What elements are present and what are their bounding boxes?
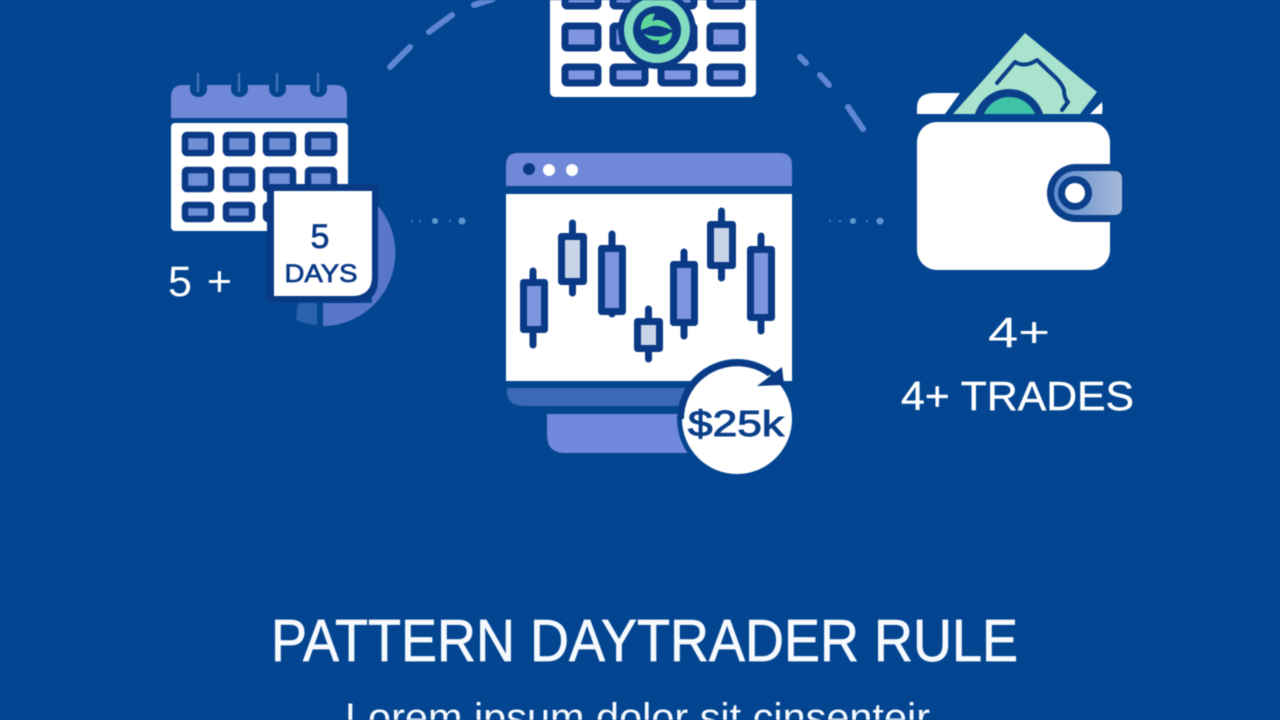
calendar ring notches: [190, 80, 327, 97]
note: 5 days: DAYS: [284, 260, 358, 288]
icon: candlestick monitor: [506, 153, 797, 479]
label: 4+: 4+: [988, 309, 1050, 357]
icon: top calendar with coin: [550, 0, 756, 97]
note: 5 days: 5: [311, 218, 329, 256]
note: 5 days: [267, 184, 378, 302]
arrow: dashed arc left: [390, 0, 493, 67]
arc behind note: [323, 207, 395, 326]
wallet clasp: [1047, 164, 1122, 222]
connector dots left: [411, 218, 466, 224]
icon: calendar left: [171, 74, 395, 326]
icon: coin: [618, 0, 696, 69]
icon: wallet: [915, 33, 1122, 270]
candlestick chart: [524, 211, 772, 359]
arrow: dashed arc right: [800, 57, 863, 129]
connector dots right: [829, 218, 884, 224]
label: 4+ trades: 4+ TRADES: [901, 373, 1134, 419]
badge: $25k: $25k: [688, 403, 785, 444]
badge: $25k: [677, 359, 797, 479]
label: 5+: 5 +: [168, 258, 232, 306]
title: PATTERN DAYTRADER RULE: [271, 608, 1018, 674]
